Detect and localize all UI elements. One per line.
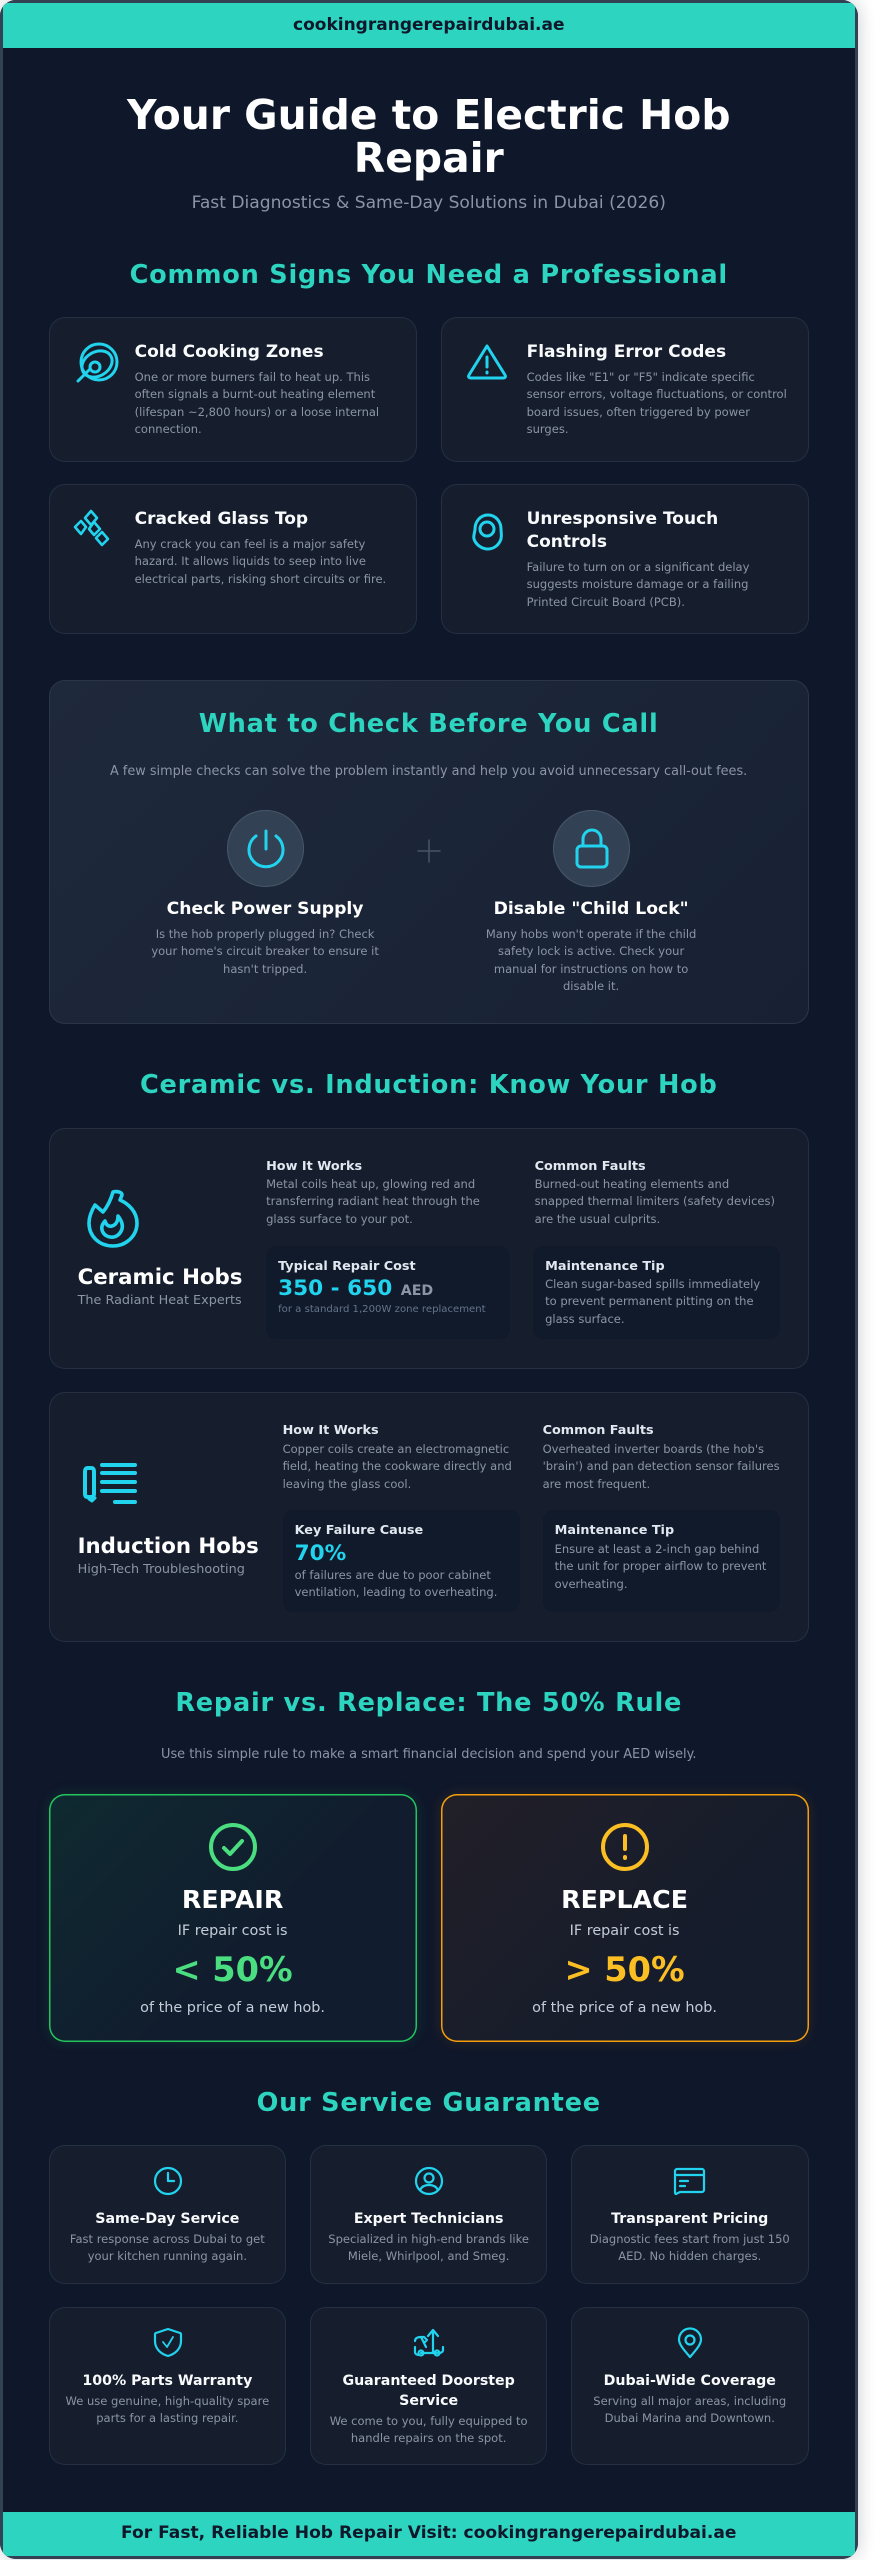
- heading: common signs: Common Signs You Need a Professional: [130, 260, 728, 290]
- box title: Maintenance Tip: [555, 1523, 674, 1538]
- check item: power description: Is the hob properly plugged in? Check: [156, 927, 374, 941]
- icon: flame: [87, 1190, 139, 1248]
- block text: 'brain') and pan detection sensor failures: [543, 1459, 780, 1473]
- icon: power supply: [227, 810, 304, 886]
- block heading: Common Faults: [535, 1159, 646, 1174]
- common faults: [543, 1423, 780, 1491]
- box text: [295, 1568, 497, 1599]
- card description: sensor errors, voltage fluctuations, or control: [527, 387, 787, 401]
- hob name: Ceramic Hobs: [78, 1265, 242, 1290]
- service text: [70, 2232, 265, 2263]
- cost value: 350 - 650 AED: [278, 1276, 433, 1301]
- footer bar: [3, 2512, 854, 2556]
- service text: Specialized in high-end brands like: [328, 2232, 529, 2246]
- card title: Cold Cooking Zones: [135, 342, 324, 362]
- intro text: A few simple checks can solve the problem instantly and help you avoid unnecessary call-out fees.: [110, 764, 747, 778]
- service text: Dubai Marina and Downtown.: [605, 2411, 775, 2425]
- service text: parts for a lasting repair.: [96, 2411, 238, 2425]
- service text: Fast response across Dubai to get: [70, 2232, 265, 2246]
- block text: field, heating the cookware directly and: [283, 1459, 512, 1473]
- card description: connection.: [135, 422, 202, 436]
- service title: Expert Technicians: [354, 2211, 503, 2227]
- service text: [330, 2414, 528, 2445]
- heading: what to check: What to Check Before You Call: [199, 709, 658, 739]
- box: typical repair cost: [266, 1246, 510, 1339]
- condition note: of the price of a new hob.: [140, 2000, 325, 2016]
- icon: plus connector: [417, 839, 441, 863]
- icon: location pin: [678, 2328, 702, 2358]
- service text: [590, 2232, 790, 2263]
- service title: Service: [399, 2393, 458, 2409]
- common faults: [535, 1159, 775, 1226]
- card title: Flashing Error Codes: [527, 342, 726, 362]
- block text: are the usual culprits.: [535, 1212, 660, 1226]
- icon: child lock: [553, 810, 630, 886]
- block text: Overheated inverter boards (the hob's: [543, 1442, 764, 1456]
- service title: [342, 2373, 515, 2409]
- threshold: > 50%: [564, 1950, 685, 1989]
- card description: suggests moisture damage or a failing: [527, 577, 748, 591]
- panel: doorstep service: [310, 2307, 547, 2465]
- box title: Maintenance Tip: [545, 1259, 665, 1274]
- box: maintenance tip: [533, 1246, 780, 1339]
- card description: [135, 370, 379, 436]
- icon: cold zone burner: [76, 342, 118, 383]
- panel: cracked glass top: [49, 484, 417, 634]
- block text: snapped thermal limiters (safety devices): [535, 1194, 775, 1208]
- service title: 100% Parts Warranty: [82, 2373, 252, 2389]
- service text: handle repairs on the spot.: [351, 2431, 506, 2445]
- check item: lock title: Disable "Child Lock": [494, 899, 689, 919]
- block text: Metal coils heat up, glowing red and: [266, 1177, 475, 1191]
- block text: Copper coils create an electromagnetic: [283, 1442, 509, 1456]
- box: key failure cause: [283, 1510, 520, 1612]
- card description: often signals a burnt-out heating element: [135, 387, 375, 401]
- panel: unresponsive touch controls: [441, 484, 809, 634]
- box text: overheating.: [555, 1577, 628, 1591]
- icon: warning triangle: [467, 344, 507, 380]
- service title: Guaranteed Doorstep: [342, 2373, 515, 2389]
- panel: what to check before you call: [49, 680, 809, 1024]
- intro text: Use this simple rule to make a smart financial decision and spend your AED wisely.: [161, 1747, 696, 1762]
- service text: your kitchen running again.: [88, 2249, 247, 2263]
- service text: [328, 2232, 529, 2263]
- title: [126, 91, 731, 182]
- header bar: site name: cookingrangerepairdubai.ae: [293, 15, 564, 35]
- panel: cold cooking zones: [49, 317, 417, 462]
- box text: [545, 1277, 760, 1326]
- box text: Clean sugar-based spills immediately: [545, 1277, 760, 1291]
- check item: lock description: manual for instructions on how to: [494, 962, 688, 976]
- hob tagline: High-Tech Troubleshooting: [78, 1562, 245, 1577]
- service title: Same-Day Service: [95, 2211, 239, 2227]
- block heading: How It Works: [283, 1423, 379, 1438]
- condition: IF repair cost is: [178, 1923, 288, 1939]
- block text: [266, 1177, 480, 1226]
- check item: power description: your home's circuit breaker to ensure it: [151, 944, 379, 958]
- service text: We use genuine, high-quality spare: [66, 2394, 269, 2408]
- panel: same-day service: [49, 2145, 286, 2284]
- card description: [527, 560, 749, 609]
- block heading: Common Faults: [543, 1423, 654, 1438]
- block text: are most frequent.: [543, 1477, 650, 1491]
- panel: ceramic hobs: [49, 1128, 809, 1369]
- heading: ceramic vs induction: Ceramic vs. Induction: Know Your Hob: [140, 1070, 718, 1100]
- box text: of failures are due to poor cabinet: [295, 1568, 491, 1582]
- check item: lock description: safety lock is active. Check your: [498, 944, 684, 958]
- card title: [527, 509, 718, 552]
- check item: power description: hasn't tripped.: [223, 962, 307, 976]
- card description: electrical parts, risking short circuits or fire.: [135, 572, 386, 586]
- title: Repair: [354, 134, 504, 182]
- check item: power title: Check Power Supply: [167, 899, 364, 919]
- hob tagline: The Radiant Heat Experts: [78, 1293, 242, 1308]
- verdict: REPLACE: [561, 1885, 688, 1914]
- box title: Key Failure Cause: [295, 1523, 423, 1538]
- card description: hazard. It allows liquids to seep into live: [135, 554, 366, 568]
- block text: Burned-out heating elements and: [535, 1177, 729, 1191]
- check item: lock description: disable it.: [563, 979, 619, 993]
- block text: leaving the glass cool.: [283, 1477, 411, 1491]
- check item: lock description: Many hobs won't operate if the child: [486, 927, 696, 941]
- panel: replace: [441, 1794, 809, 2042]
- block heading: How It Works: [266, 1159, 362, 1174]
- panel: induction hobs: [49, 1392, 809, 1642]
- card description: board issues, often triggered by power: [527, 405, 750, 419]
- heading: service guarantee: Our Service Guarantee: [257, 2088, 601, 2118]
- verdict: REPAIR: [182, 1885, 283, 1914]
- service text: Diagnostic fees start from just 150: [590, 2232, 790, 2246]
- service text: AED. No hidden charges.: [618, 2249, 761, 2263]
- service text: Miele, Whirlpool, and Smeg.: [348, 2249, 509, 2263]
- condition note: of the price of a new hob.: [532, 2000, 717, 2016]
- card description: [527, 370, 787, 436]
- icon: alert circle: [601, 1823, 649, 1871]
- card title: Controls: [527, 532, 607, 552]
- card title: Unresponsive Touch: [527, 509, 718, 529]
- header bar: site name: [3, 3, 854, 48]
- icon: induction coil: [83, 1463, 137, 1504]
- how it works: [282, 1423, 512, 1491]
- block text: glass surface to your pot.: [266, 1212, 413, 1226]
- threshold: < 50%: [172, 1950, 293, 1989]
- card title: Cracked Glass Top: [135, 509, 308, 529]
- service text: [66, 2394, 269, 2425]
- footer bar: For Fast, Reliable Hob Repair Visit: cookingrangerepairdubai.ae: [121, 2523, 736, 2543]
- condition: IF repair cost is: [570, 1923, 680, 1939]
- icon: technician: [414, 2166, 444, 2196]
- box text: ventilation, leading to overheating.: [295, 1585, 497, 1599]
- subtitle: Fast Diagnostics & Same-Day Solutions in Dubai (2026): [192, 193, 666, 213]
- card description: surges.: [527, 422, 568, 436]
- box text: [554, 1542, 766, 1591]
- service text: [571, 2393, 808, 2428]
- icon: scooter delivery: [414, 2328, 444, 2357]
- panel: expert technicians: [310, 2145, 547, 2284]
- icon: shield: [154, 2328, 182, 2358]
- panel: dubai-wide coverage: [571, 2307, 808, 2465]
- icon: cracked glass diamonds: [74, 510, 110, 546]
- box text: to prevent permanent pitting on the: [545, 1294, 754, 1308]
- cost note: for a standard 1,200W zone replacement: [278, 1304, 486, 1315]
- icon: pricing card: [674, 2168, 706, 2196]
- card description: One or more burners fail to heat up. This: [135, 370, 370, 384]
- panel: repair: [49, 1794, 417, 2042]
- block text: [543, 1442, 780, 1491]
- hob name: Induction Hobs: [78, 1534, 259, 1559]
- icon: check circle: [209, 1823, 257, 1871]
- check item: power description: [151, 927, 379, 976]
- box: maintenance tip: [543, 1510, 780, 1612]
- block text: transferring radiant heat through the: [266, 1194, 480, 1208]
- icon: clock: [154, 2166, 182, 2196]
- card description: Codes like "E1" or "F5" indicate specific: [527, 370, 755, 384]
- box text: Ensure at least a 2-inch gap behind: [555, 1542, 759, 1556]
- card description: Failure to turn on or a significant delay: [527, 560, 749, 574]
- title: Your Guide to Electric Hob: [127, 91, 731, 139]
- card description: Any crack you can feel is a major safety: [135, 537, 365, 551]
- service title: Dubai-Wide Coverage: [604, 2373, 776, 2389]
- how it works: [266, 1159, 480, 1226]
- panel: transparent pricing: [571, 2145, 808, 2284]
- service text: We come to you, fully equipped to: [330, 2414, 528, 2428]
- block text: [535, 1177, 775, 1226]
- block text: [282, 1442, 512, 1491]
- box title: Typical Repair Cost: [278, 1259, 416, 1274]
- box text: glass surface.: [545, 1312, 625, 1326]
- card description: [134, 537, 386, 586]
- heading: repair vs replace: Repair vs. Replace: The 50% Rule: [175, 1688, 682, 1718]
- failure percentage: 70%: [295, 1541, 346, 1566]
- box text: the unit for proper airflow to prevent: [555, 1559, 766, 1573]
- check item: lock description: [486, 927, 696, 993]
- service title: Transparent Pricing: [611, 2211, 768, 2227]
- card description: Printed Circuit Board (PCB).: [527, 595, 685, 609]
- service text: Serving all major areas, including: [593, 2394, 786, 2408]
- panel: flashing error codes: [441, 317, 809, 462]
- icon: touch control: [472, 514, 503, 550]
- card description: (lifespan ~2,800 hours) or a loose internal: [135, 405, 379, 419]
- panel: parts warranty: [49, 2307, 286, 2465]
